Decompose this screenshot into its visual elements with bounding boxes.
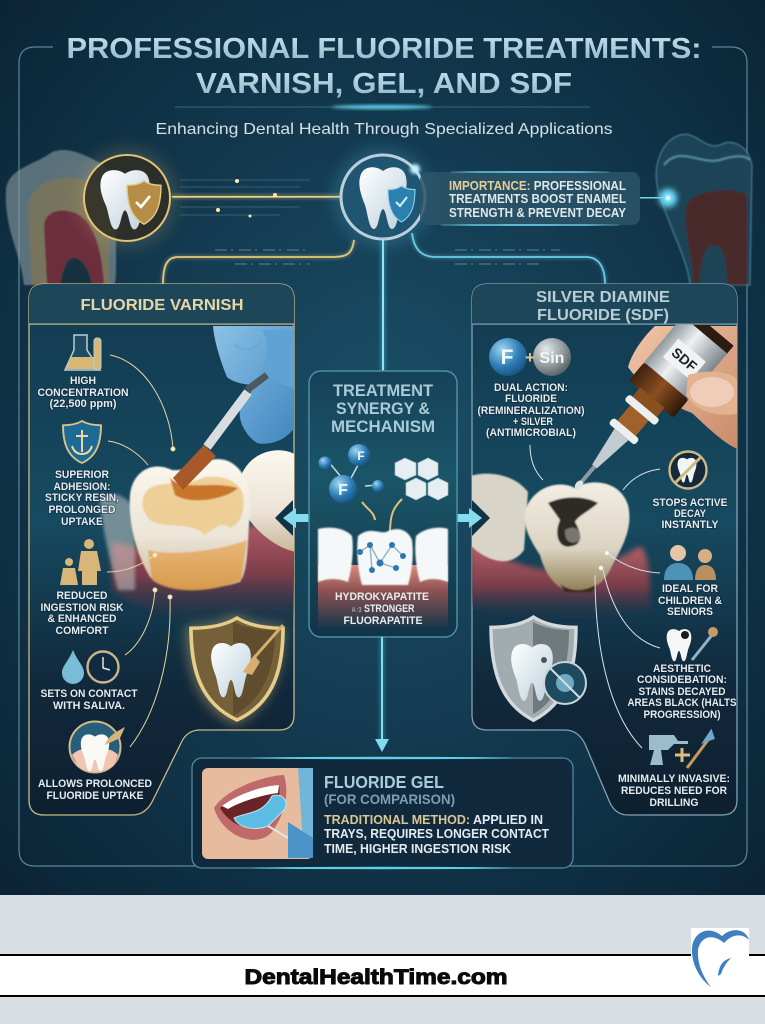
connector: blue to SDF panel (412, 233, 605, 284)
blue badge (333, 147, 433, 247)
varnish leader lines (107, 355, 175, 747)
gel heading: FLUORIDE GEL (324, 772, 444, 792)
SDF bottle (574, 324, 734, 490)
varnish labels: CONCENTRATION (38, 387, 129, 399)
varnish labels: REDUCED (56, 590, 108, 602)
outer frame (19, 47, 747, 866)
importance callout: STRENGTH & PREVENT DECAY (449, 205, 626, 220)
SDF labels: REDUCES NEED FOR (621, 785, 727, 797)
gum (472, 543, 654, 614)
varnish labels: INGESTION RISK (40, 602, 124, 614)
SDF labels: AREAS BLACK (HALTS (628, 697, 736, 709)
icon: clock (88, 652, 118, 682)
SDF labels: AESTHETIC (653, 663, 711, 675)
SDF labels: FLUORIDE (505, 393, 557, 405)
title: VARNISH, GEL, AND SDF (196, 68, 572, 100)
SDF labels: IDEAL FOR (662, 583, 718, 595)
gel body: TRAYS, REQUIRES LONGER CONTACT (324, 826, 549, 841)
varnish labels (38, 375, 152, 802)
icon: drill and brush (649, 732, 713, 768)
SDF labels: MINIMALLY INVASIVE: (618, 773, 730, 785)
gold shield (186, 614, 284, 726)
icon: stained tooth and brush (667, 627, 718, 661)
importance callout: IMPORTANCE: PROFESSIONAL (449, 178, 626, 193)
connector to gel panel (375, 637, 389, 752)
neighbour tooth left (100, 494, 135, 590)
panel: silver diamine fluoride (470, 284, 740, 815)
icon: anchor shield (63, 421, 101, 463)
right arrow (457, 500, 490, 536)
SDF bottle: SDF (669, 344, 701, 375)
importance callout: TREATMENTS BOOST ENAMEL (449, 191, 626, 206)
varnish labels: HIGH (70, 375, 96, 387)
icon: fluoride + silver: + (525, 348, 535, 367)
SDF labels: (ANTIMICROBIAL) (486, 427, 576, 439)
panel: treatment synergy and mechanism (309, 371, 457, 637)
gold badge (77, 148, 177, 248)
title (66, 33, 702, 100)
synergy heading: TREATMENT (333, 381, 434, 400)
SDF labels: PROGRESSION) (644, 709, 721, 721)
SDF labels (478, 382, 736, 809)
SDF labels: (REMINERALIZATION) (478, 405, 585, 417)
SDF scene (470, 309, 740, 621)
logo (691, 928, 749, 987)
SDF labels: DRILLING (650, 797, 698, 809)
crystal lattice (395, 458, 448, 500)
varnished tooth (130, 459, 250, 590)
icon: fluoride + silver: Sin (540, 350, 564, 367)
right tooth x-ray (656, 134, 752, 285)
footer website name: DentalHealthTime.com (244, 966, 508, 989)
synergy caption: A↑3 STRONGER (352, 603, 415, 615)
footer background (0, 895, 765, 1024)
title: PROFESSIONAL FLUORIDE TREATMENTS: (66, 33, 702, 65)
subtitle: Enhancing Dental Health Through Specialized Applications (156, 121, 612, 138)
icon: no decay (670, 452, 706, 488)
left tooth cross-section (6, 150, 116, 285)
SDF leader lines (530, 445, 660, 748)
synergy caption: HYDROKYAPATITE (335, 591, 429, 603)
SDF header (472, 284, 737, 325)
varnish labels: WITH SALIVA. (53, 700, 125, 712)
gel mouth image (202, 768, 313, 859)
varnish labels: PROLONGED (48, 504, 116, 516)
varnish labels: SUPERIOR (55, 469, 109, 481)
gloved hand (213, 326, 296, 444)
fluoride molecules: F (338, 482, 348, 499)
icon: senior and child (664, 545, 716, 580)
gel body: TRADITIONAL METHOD: APPLIED IN (324, 812, 543, 827)
connector: gold to varnish panel (163, 240, 354, 284)
varnish header (29, 284, 294, 325)
varnish labels: & ENHANCED (48, 613, 117, 625)
SDF labels: CONSIDEBATION: (637, 674, 727, 686)
SDF labels: STAINS DECAYED (638, 686, 726, 698)
varnish labels: ADHESION: (54, 481, 110, 493)
varnish labels: STICKY RESIN, (45, 492, 119, 504)
icon: flask (65, 335, 101, 370)
neighbour tooth right (240, 450, 296, 552)
footer band (0, 955, 765, 996)
SDF labels: CHILDREN & (658, 595, 722, 607)
gel body: TIME, HIGHER INGESTION RISK (324, 841, 512, 856)
left arrow (275, 500, 310, 536)
brush (173, 375, 267, 490)
title divider glow (175, 105, 590, 109)
icon: family (60, 539, 101, 585)
SDF labels: DUAL ACTION: (494, 382, 568, 394)
silver shield (491, 617, 586, 720)
icon: fluoride + silver (489, 338, 571, 376)
teeth row (318, 528, 448, 585)
gel body (324, 812, 549, 856)
SDF labels: + SILVER (513, 416, 553, 428)
varnish labels: ALLOWS PROLONCED (38, 778, 152, 790)
varnish labels: COMFORT (56, 625, 109, 637)
synergy caption (335, 591, 429, 627)
synergy heading: MECHANISM (331, 417, 435, 436)
SDF header: FLUORIDE (SDF) (537, 307, 669, 324)
connector: gold horizontal (172, 179, 342, 218)
synergy caption: FLUORAPATITE (344, 615, 422, 627)
SDF header: SILVER DIAMINE (536, 289, 670, 306)
synergy heading (331, 381, 435, 436)
panel: fluoride gel (192, 757, 573, 869)
icon: tooth in circle (70, 722, 125, 772)
SDF labels: STOPS ACTIVE (652, 497, 728, 509)
mechanism arrows (362, 499, 402, 533)
gel subheading: (FOR COMPARISON) (324, 791, 455, 807)
synergy heading: SYNERGY & (336, 399, 430, 418)
SDF labels: INSTANTLY (662, 519, 719, 531)
varnish labels: UPTAKE (61, 516, 103, 528)
fluoride molecules (318, 444, 384, 503)
thumb (686, 372, 740, 415)
icon: fluoride + silver: F (501, 346, 514, 369)
neighbour tooth (470, 474, 528, 561)
fluoride molecules: F (357, 449, 365, 463)
molecule in tooth (357, 542, 406, 573)
importance callout (420, 171, 664, 226)
SDF labels: DECAY (674, 508, 707, 520)
SDF labels: SENIORS (667, 606, 713, 618)
decayed tooth (524, 482, 629, 592)
connector: center vertical (380, 240, 386, 372)
varnish scene (100, 326, 300, 626)
gum band (318, 565, 448, 628)
connector dashes (215, 250, 560, 264)
icon: water drop (62, 650, 84, 684)
hand (628, 326, 740, 450)
varnish header: FLUORIDE VARNISH (80, 297, 244, 314)
gum (108, 522, 294, 624)
panel: fluoride varnish (29, 284, 300, 815)
varnish labels: FLUORIDE UPTAKE (46, 790, 144, 802)
varnish labels: SETS ON CONTACT (40, 688, 138, 700)
varnish labels: (22,500 ppm) (50, 398, 117, 410)
